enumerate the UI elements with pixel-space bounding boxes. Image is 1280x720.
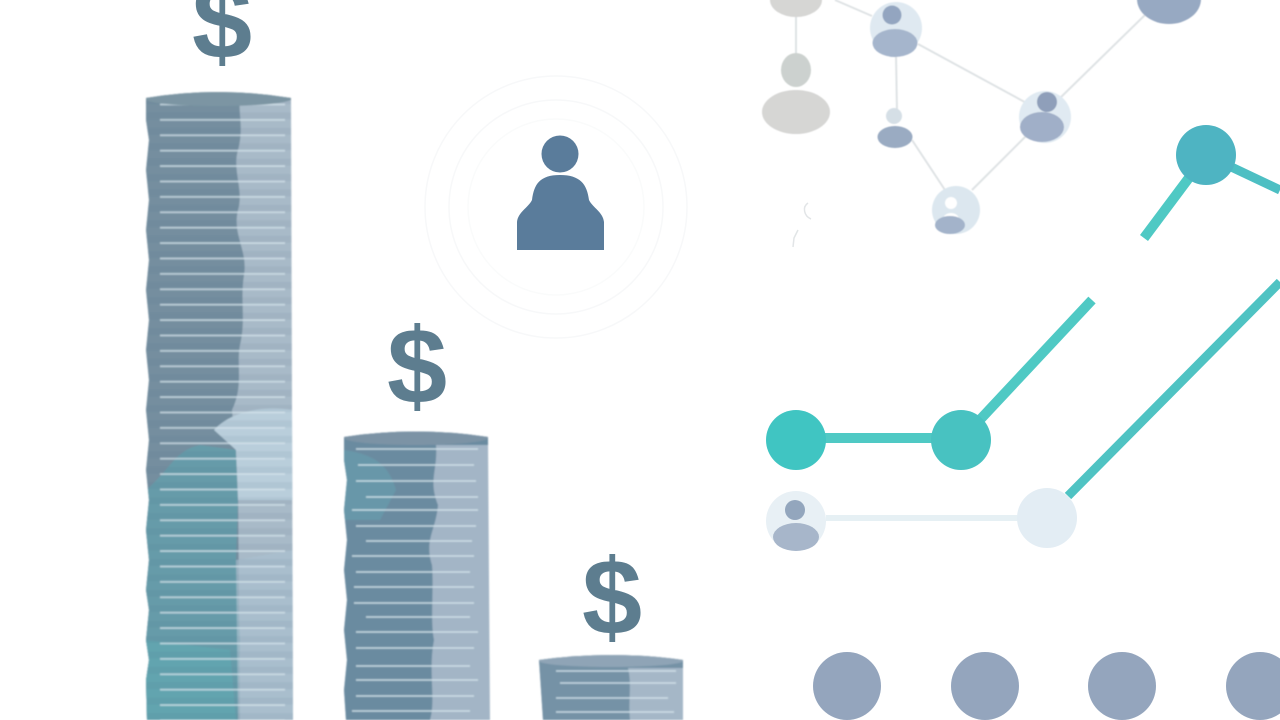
icon: person with rings bbox=[425, 76, 687, 338]
stack: medium coin stack bbox=[340, 430, 495, 720]
node: person upper bbox=[870, 2, 922, 57]
network of people bbox=[762, 0, 1201, 234]
dollar sign: short stack: $ bbox=[582, 536, 642, 657]
line chart: teal upper line bbox=[766, 125, 1280, 470]
line chart: pale lower line bbox=[766, 282, 1280, 551]
row of four blue dots bbox=[813, 652, 1280, 720]
node: teal point top bbox=[1176, 125, 1236, 185]
node: person bottom bbox=[932, 186, 980, 234]
stack: tall coin stack bbox=[140, 88, 300, 720]
node: person right bbox=[1019, 91, 1071, 143]
node: pale point bbox=[1017, 488, 1077, 548]
node: small person bbox=[878, 108, 912, 148]
dollar sign: medium stack: $ bbox=[387, 305, 447, 426]
node: teal point one bbox=[766, 410, 826, 470]
node: teal point two bbox=[931, 410, 991, 470]
stack: short coin stack bbox=[535, 654, 685, 720]
node: person on lower line bbox=[766, 491, 826, 551]
node: grey person top-left bbox=[762, 0, 830, 134]
node: blue circle top-right bbox=[1137, 0, 1201, 24]
icon: faint scribbles bbox=[793, 203, 811, 247]
